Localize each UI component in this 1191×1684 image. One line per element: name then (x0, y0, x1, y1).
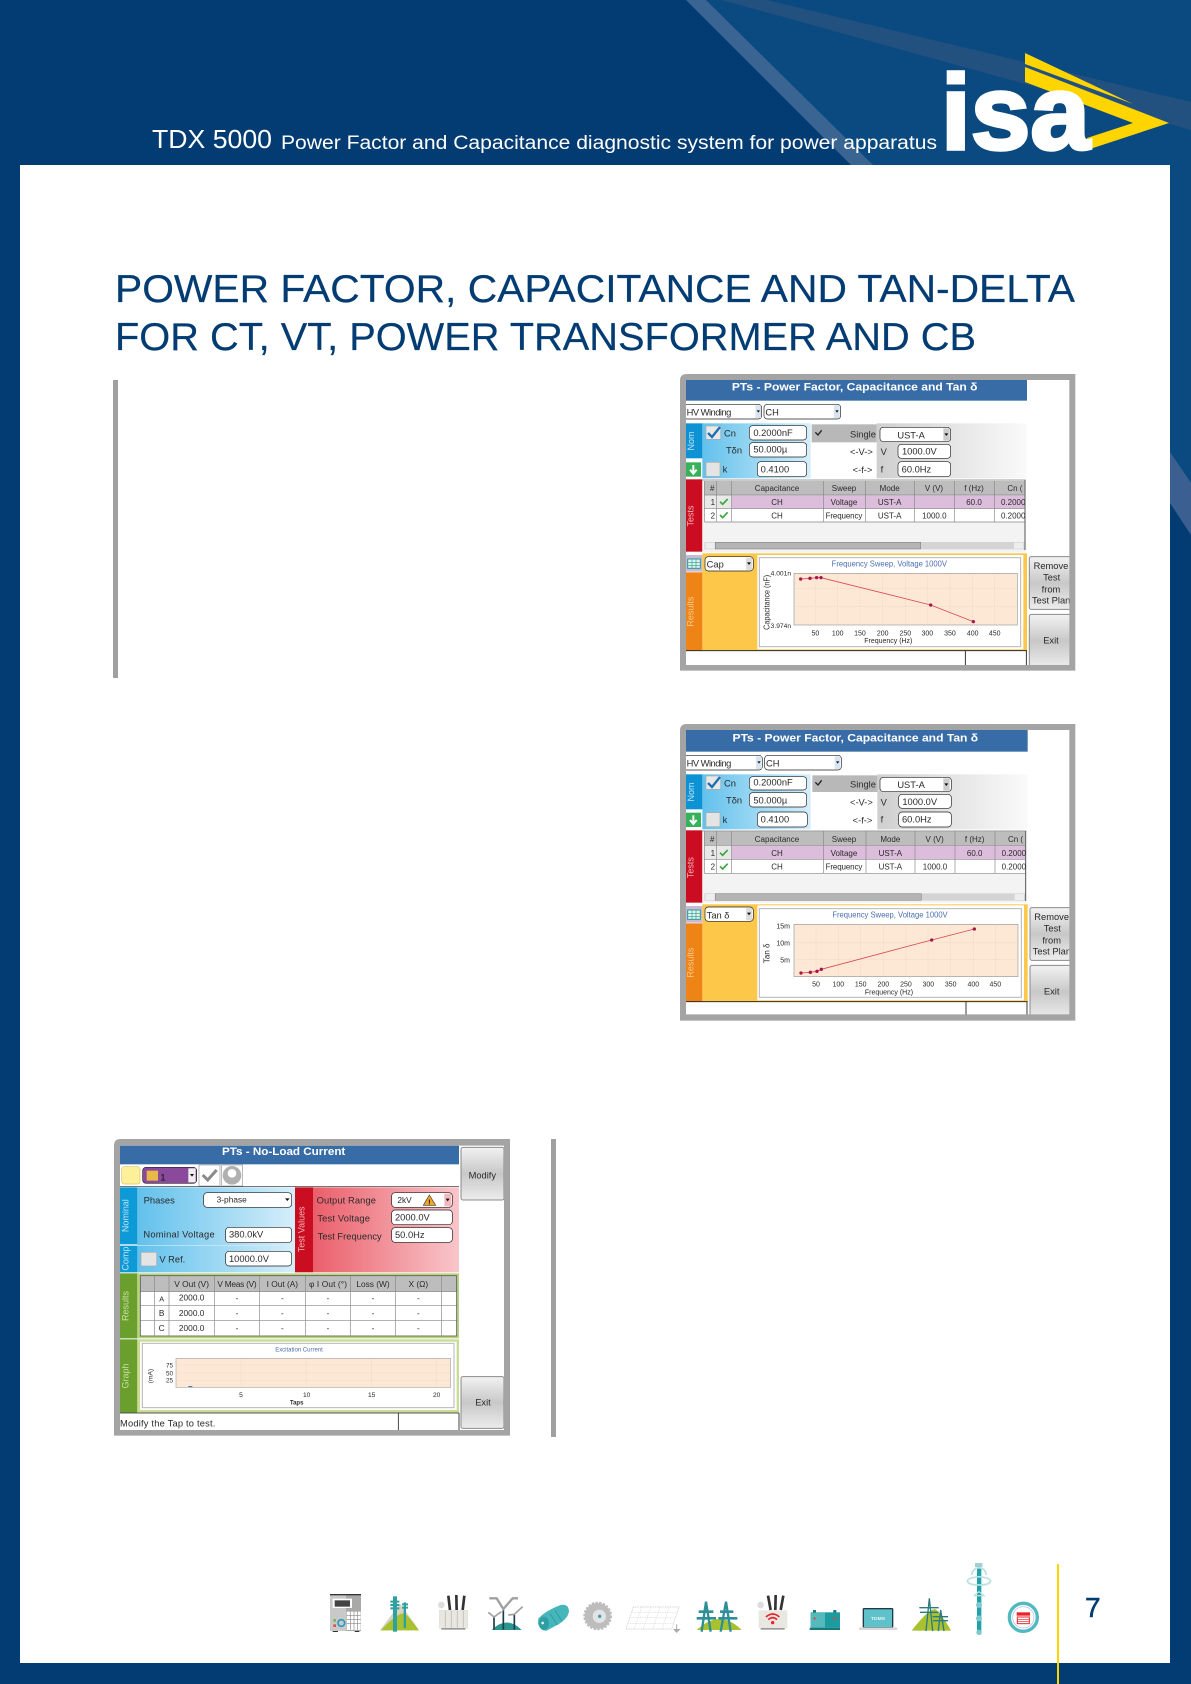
results table: - (236, 1324, 239, 1333)
graph: excitation current: 75 (166, 1362, 173, 1369)
chart: tan delta vs frequency: 10m (776, 940, 790, 947)
graph: excitation current: 5 (239, 1392, 243, 1399)
graph: excitation current (120, 1339, 459, 1413)
test values panel: 2000.0V (395, 1213, 431, 1223)
chart: capacitance vs frequency: 50 (811, 631, 819, 638)
tests table: Frequency (826, 511, 862, 520)
nominal panel: Nom (686, 783, 696, 801)
nominal panel: 1000.0V (902, 447, 938, 457)
nominal panel: <-f-> (853, 815, 872, 825)
nominal panel: Single (850, 429, 876, 439)
logo: isa (941, 53, 1169, 172)
tests table: CH (771, 849, 783, 858)
chart: tan delta vs frequency: 200 (878, 982, 889, 989)
results table: X (Ω) (409, 1279, 428, 1289)
toolbar: 1 (160, 1172, 166, 1182)
chart: tan delta vs frequency: 450 (990, 982, 1001, 989)
nominal panel: 50.000µ (753, 445, 788, 455)
results table: Results (121, 1291, 131, 1321)
button: exit (1030, 965, 1073, 1019)
results table: - (417, 1294, 420, 1303)
nominal panel: <-V-> (850, 797, 873, 807)
tests table: 0.2000 (1001, 498, 1026, 507)
icon: motor (538, 1605, 569, 1631)
tests table: Tests (686, 505, 696, 526)
nominal panel: k (723, 815, 728, 825)
chart: tan delta vs frequency (757, 905, 1024, 1000)
nominal panel (686, 774, 1028, 829)
chart: capacitance vs frequency: 350 (944, 631, 956, 638)
chart: tan delta vs frequency: 350 (945, 982, 957, 989)
results table: - (372, 1309, 375, 1318)
tests table: Sweep (832, 484, 857, 493)
title bar (686, 730, 1028, 752)
screenshot: tan delta frequency sweep (680, 724, 1075, 1021)
status bar (120, 1413, 459, 1430)
icon: battery: + (813, 1615, 817, 1622)
test values panel: Output Range (317, 1195, 376, 1205)
tests table: Mode (880, 835, 901, 844)
nominal panel: Comp (121, 1247, 131, 1271)
nominal panel: V Ref. (159, 1255, 185, 1265)
chart: tan delta vs frequency: 400 (968, 982, 979, 989)
tests table: Tests (686, 857, 696, 878)
results table: V Meas (V) (217, 1279, 257, 1289)
tests table: V (V) (926, 835, 944, 844)
button: remove test from test plan: Remove (1034, 912, 1069, 922)
winding selectors: CH (765, 407, 779, 417)
nominal panel: Nominal (121, 1199, 131, 1232)
results table: 2000.0 (179, 1308, 205, 1318)
title: POWER FACTOR, CAPACITANCE AND TAN-DELTA (115, 268, 1075, 311)
tests table: 2 (711, 511, 716, 520)
icon: transmission towers (697, 1602, 742, 1632)
chart: capacitance vs frequency: 3.974n (771, 623, 791, 630)
tests table: Capacitance (755, 484, 800, 493)
chart: capacitance vs frequency: 100 (832, 631, 844, 638)
test values panel (295, 1187, 459, 1272)
tests table: 2 (711, 863, 716, 872)
nominal panel: UST-A (897, 430, 926, 440)
logo: isa: isa (941, 54, 1091, 172)
nominal panel (686, 423, 1027, 478)
tests table: Voltage (831, 498, 858, 507)
icon: pylon on hill (912, 1598, 951, 1631)
nominal panel: 3-phase (217, 1195, 247, 1205)
results table: - (417, 1324, 420, 1333)
nominal panel: Nominal Voltage (143, 1230, 215, 1240)
tests table: Cn ( (1007, 484, 1023, 493)
chart: tan delta vs frequency: 250 (900, 982, 912, 989)
nominal panel: f (881, 464, 884, 474)
tests table: Sweep (832, 835, 857, 844)
results table: φ I Out (°) (309, 1279, 347, 1289)
icon: power transformer (438, 1595, 468, 1630)
icon: laptop TDMS: TDMS (871, 1616, 886, 1622)
winding selectors (683, 404, 841, 419)
status bar: Modify the Tap to test. (120, 1418, 215, 1428)
nominal panel: Tδn (726, 445, 742, 455)
results table: 2000.0 (179, 1292, 205, 1302)
tests table (686, 830, 1027, 903)
tests table: UST-A (878, 498, 902, 507)
nominal panel: 0.4100 (761, 464, 789, 474)
results table: C (159, 1323, 165, 1333)
nominal panel: 0.2000nF (753, 778, 793, 788)
chart: capacitance vs frequency: Frequency (Hz) (864, 638, 912, 645)
results table: - (372, 1324, 375, 1333)
vertical rule: lower text block (551, 1139, 556, 1437)
nominal panel: Cn (724, 779, 736, 789)
results table: 2000.0 (179, 1323, 205, 1333)
results table: - (372, 1294, 375, 1303)
nominal panel: k (723, 465, 728, 475)
results table: - (327, 1309, 330, 1318)
tests table (686, 479, 1026, 553)
tests table: Cn ( (1008, 835, 1023, 844)
vertical rule: upper text block (113, 380, 118, 678)
button: exit: Exit (1043, 636, 1059, 646)
tests table: # (710, 835, 715, 844)
chart: capacitance vs frequency: 450 (989, 631, 1001, 638)
header subtitle (152, 124, 937, 154)
chart: capacitance vs frequency: 150 (854, 631, 866, 638)
graph: excitation current: 25 (166, 1378, 173, 1385)
button: remove test from test plan: Test (1044, 924, 1061, 934)
nominal panel: 1000.0V (902, 797, 938, 807)
tests table: 60.0 (966, 498, 982, 507)
results table: - (281, 1309, 284, 1318)
results table (120, 1273, 459, 1338)
title bar: PTs - Power Factor, Capacitance and Tan δ (732, 382, 978, 394)
results table: A (159, 1294, 164, 1303)
footer product icons (330, 1563, 1037, 1635)
tests table: 0.2000 (1002, 849, 1027, 858)
tests table: Mode (880, 484, 900, 493)
results table: - (327, 1294, 330, 1303)
tests table: 1000.0 (922, 511, 947, 520)
tests table: f (Hz) (965, 835, 985, 844)
icon: laptop TDMS (859, 1608, 897, 1630)
results table: Loss (W) (356, 1279, 390, 1289)
chart: tan delta vs frequency: Frequency Sweep, Voltage 1000V (832, 911, 948, 920)
nominal panel: f (881, 815, 884, 825)
button: remove test from test plan: Test Plan (1032, 596, 1070, 606)
button: exit (461, 1377, 504, 1428)
graph: excitation current: 20 (433, 1392, 441, 1399)
nominal panel: 50.000µ (753, 795, 788, 805)
winding selectors: HV Winding (687, 407, 731, 417)
chart: tan delta vs frequency: 50 (812, 982, 820, 989)
chart: capacitance vs frequency: 300 (922, 631, 933, 638)
results table: - (236, 1309, 239, 1318)
tests table: f (Hz) (964, 484, 984, 493)
toolbar (120, 1165, 459, 1187)
chart: tan delta vs frequency: 15m (776, 924, 790, 931)
graph: excitation current: Graph (121, 1364, 131, 1388)
title bar (686, 380, 1027, 401)
tests table: 0.2000 (1001, 511, 1026, 520)
button: exit: Exit (475, 1398, 491, 1408)
status bar (686, 651, 1027, 665)
results table: - (281, 1294, 284, 1303)
results table: - (327, 1324, 330, 1333)
results table: V Out (V) (174, 1279, 209, 1289)
icon: line pole on hill (380, 1596, 419, 1632)
nominal panel: <-V-> (850, 447, 873, 457)
nominal panel: 380.0kV (229, 1230, 264, 1240)
tests table: 1000.0 (923, 863, 948, 872)
results section: Results (686, 596, 696, 627)
tests table: CH (771, 511, 783, 520)
results section (686, 553, 1027, 650)
nominal panel: <-f-> (853, 465, 872, 475)
results section: Cap (707, 560, 724, 570)
footer gold divider (1057, 1564, 1059, 1684)
nominal panel: 60.0Hz (902, 464, 932, 474)
chart: tan delta vs frequency: Frequency (Hz) (865, 989, 913, 996)
screenshot: capacitance frequency sweep (680, 374, 1075, 671)
nominal panel: 0.2000nF (753, 428, 793, 438)
chart: capacitance vs frequency: 4.001n (771, 570, 791, 577)
tests table: UST-A (879, 863, 903, 872)
button: remove test from test plan (1029, 557, 1073, 609)
winding selectors: CH (766, 758, 779, 768)
test values panel: 2kV (397, 1195, 412, 1205)
button: exit (1029, 614, 1073, 668)
results table: B (159, 1308, 165, 1318)
test values panel: Test Values (297, 1206, 307, 1252)
results section: Results (686, 947, 696, 978)
chart: tan delta vs frequency: 150 (855, 982, 867, 989)
button: remove test from test plan (1030, 908, 1073, 960)
button: remove test from test plan: from (1042, 935, 1061, 945)
header subtitle: Power Factor and Capacitance diagnostic system for power apparatus (281, 133, 937, 154)
title: FOR CT, VT, POWER TRANSFORMER AND CB (115, 316, 976, 359)
results table: - (236, 1294, 239, 1303)
title bar: PTs - No-Load Current (222, 1146, 346, 1158)
chart: capacitance vs frequency: 400 (967, 631, 979, 638)
button: exit: Exit (1044, 987, 1060, 997)
nominal panel (120, 1187, 295, 1272)
chart: capacitance vs frequency: 200 (877, 631, 889, 638)
tests table: CH (771, 498, 783, 507)
icon: battery (810, 1610, 840, 1630)
chart: tan delta vs frequency: 300 (923, 982, 934, 989)
button: remove test from test plan: Test Plan (1033, 947, 1071, 957)
tests table: 1 (711, 498, 716, 507)
tests table: Voltage (831, 849, 858, 858)
tests table: Frequency (826, 863, 862, 872)
button: modify: Modify (469, 1170, 496, 1180)
nominal panel: UST-A (897, 780, 926, 790)
test values panel: ! (428, 1198, 431, 1207)
title bar (120, 1146, 459, 1164)
page number: 7 (1085, 1592, 1101, 1623)
test values panel: Test Frequency (318, 1231, 382, 1241)
icon: ring with red transformer (1009, 1603, 1037, 1631)
nominal panel: Single (850, 779, 876, 789)
chart: tan delta vs frequency: Tan δ (763, 943, 772, 963)
graph: excitation current: 50 (166, 1370, 173, 1377)
graph: excitation current: Excitation Current (275, 1347, 323, 1353)
button: remove test from test plan: from (1042, 584, 1061, 594)
button: modify (461, 1147, 504, 1200)
tests table: 1 (711, 849, 716, 858)
nominal panel: 10000.0V (229, 1254, 270, 1264)
nominal panel: 60.0Hz (902, 815, 932, 825)
tests table: UST-A (879, 849, 903, 858)
winding selectors (683, 755, 841, 770)
title (115, 268, 1075, 359)
graph: excitation current: 15 (368, 1392, 376, 1399)
chart: tan delta vs frequency: 5m (780, 957, 790, 964)
screenshot: no-load current (114, 1139, 510, 1436)
icon: test set (330, 1594, 361, 1632)
icon: bushing pole (967, 1563, 991, 1635)
tests table: Capacitance (755, 835, 800, 844)
nominal panel: Phases (144, 1195, 175, 1205)
results section: Tan δ (707, 910, 729, 920)
title bar: PTs - Power Factor, Capacitance and Tan δ (732, 733, 978, 745)
tests table: 60.0 (967, 849, 983, 858)
icon: wind turbines (488, 1598, 523, 1630)
tests table: 0.2000 (1002, 863, 1027, 872)
button: remove test from test plan: Remove (1034, 561, 1068, 571)
nominal panel: V (881, 447, 888, 457)
graph: excitation current: 10 (303, 1392, 311, 1399)
nominal panel: Nom (686, 432, 696, 450)
icon: solar panel (626, 1607, 681, 1633)
test values panel: 50.0Hz (395, 1230, 425, 1240)
tests table: # (710, 484, 715, 493)
chart: capacitance vs frequency: 250 (900, 631, 911, 638)
nominal panel: 0.4100 (761, 815, 789, 825)
tests table: V (V) (925, 484, 943, 493)
results section (686, 904, 1028, 1001)
icon: turbine runner (585, 1603, 611, 1629)
status bar (686, 1002, 1028, 1016)
nominal panel: Tδn (726, 795, 742, 805)
chart: capacitance vs frequency: Capacitance (nF) (762, 575, 771, 630)
header subtitle: TDX 5000 (152, 124, 272, 154)
chart: capacitance vs frequency: Frequency Sweep, Voltage 1000V (832, 560, 948, 569)
winding selectors: HV Winding (687, 758, 731, 768)
button: remove test from test plan: Test (1043, 573, 1061, 583)
results table: - (281, 1324, 284, 1333)
results table: I Out (A) (267, 1279, 298, 1289)
test values panel: Test Voltage (317, 1214, 370, 1224)
graph: excitation current: (mA) (148, 1369, 155, 1383)
results table: - (417, 1309, 420, 1318)
icon: smart transformer (757, 1595, 787, 1630)
chart: tan delta vs frequency: 100 (833, 982, 844, 989)
chart: capacitance vs frequency (757, 555, 1023, 649)
graph: excitation current: Taps (290, 1400, 304, 1406)
nominal panel: V (881, 797, 888, 807)
tests table: CH (771, 863, 783, 872)
tests table: UST-A (878, 511, 902, 520)
nominal panel: Cn (724, 429, 736, 439)
